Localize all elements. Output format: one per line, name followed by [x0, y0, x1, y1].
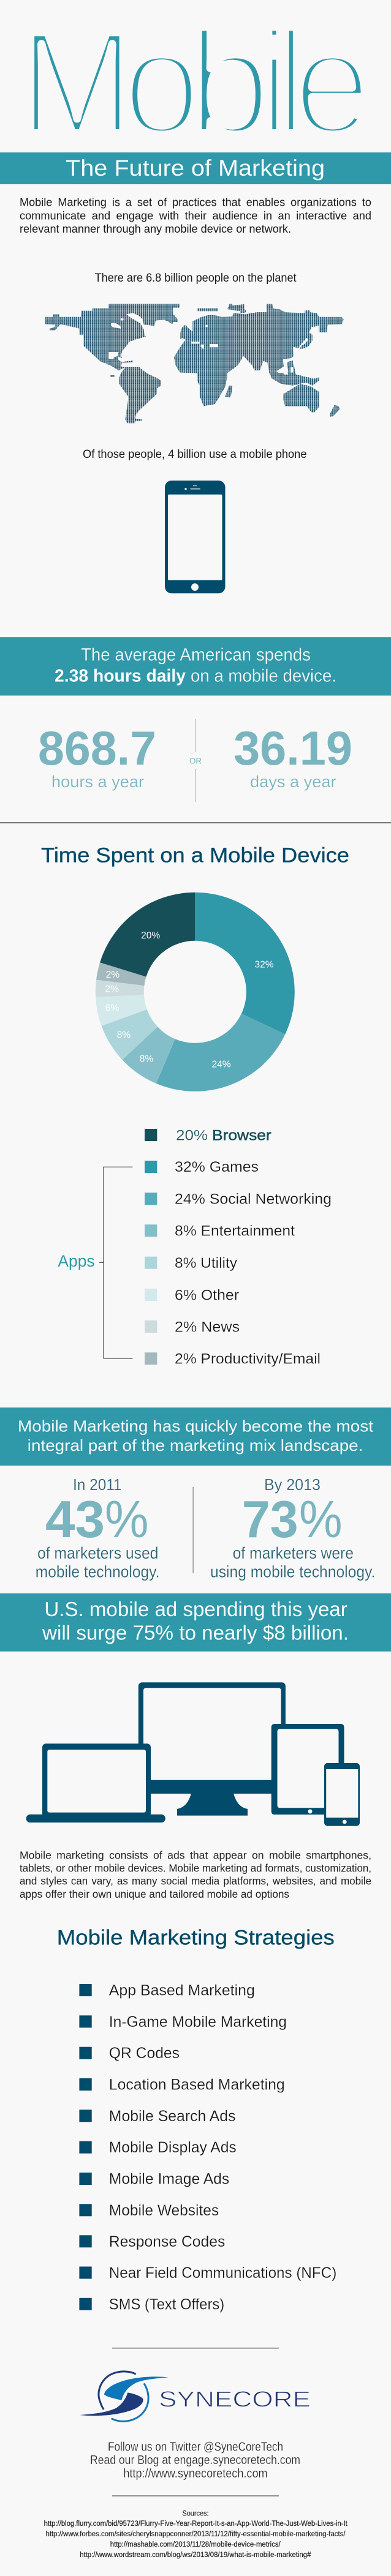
banner: The Future of Marketing: The Future of Marketing — [66, 155, 325, 181]
stat: 43% in 2011: of marketers used — [37, 1544, 158, 1562]
banner: average American — [0, 637, 391, 695]
banner: integral part of marketing mix: Mobile Marketing has quickly become the most — [18, 1417, 374, 1435]
strategies list: App Based Marketing — [109, 1982, 255, 1999]
strategies list: Response Codes — [109, 2233, 225, 2250]
logo: Synecore — [80, 2372, 311, 2421]
banner: average American: on a mobile device. — [191, 666, 336, 686]
banner: ad spending: U.S. mobile ad spending this year — [44, 1598, 347, 1620]
strategies list: SMS (Text Offers) — [109, 2296, 224, 2313]
donut chart: 20% — [141, 930, 160, 941]
title: Mobile: b — [188, 0, 271, 165]
text: world population: There are 6.8 billion people on the planet — [95, 272, 297, 285]
intro paragraph: relevant manner through any mobile device or network. — [20, 222, 291, 235]
legend: browser: Browser — [212, 1128, 271, 1144]
divider with OR: OR — [189, 757, 202, 766]
intro paragraph — [20, 196, 371, 235]
strategies list: Mobile Websites — [109, 2202, 219, 2219]
contact details: Read our Blog at engage.synecoretech.com — [90, 2454, 300, 2467]
stat: 43% in 2011: % — [105, 1491, 148, 1549]
strategies list: Mobile Search Ads — [109, 2108, 235, 2125]
divider with OR — [189, 719, 202, 802]
legend: 32% Games — [175, 1159, 259, 1175]
stat: 73% by 2013: using mobile technology. — [210, 1563, 375, 1581]
stat: 73% by 2013: By 2013 — [264, 1475, 321, 1494]
sources: Sources: — [182, 2510, 209, 2517]
stat: days a year: days a year — [250, 773, 336, 791]
strategies list: QR Codes — [109, 2045, 180, 2062]
strategies list: Mobile Image Ads — [109, 2171, 229, 2188]
icon: tablet — [271, 1724, 344, 1814]
heading: Time Spent on a Mobile Device: Time Spent on a Mobile Device — [41, 844, 349, 867]
stat: 43% in 2011 — [36, 1475, 159, 1581]
strategies list: Near Field Communications (NFC) — [109, 2264, 336, 2282]
donut chart: 32% — [254, 960, 274, 970]
banner: integral part of marketing mix — [0, 1407, 391, 1466]
heading: Mobile Marketing Strategies: Mobile Marketing Strategies — [57, 1926, 335, 1950]
stat: 43% in 2011: 43 — [45, 1491, 105, 1549]
banner: ad spending — [0, 1593, 391, 1652]
sources: http://www.wordstream.com/blog/ws/2013/08/19/what-is-mobile-marketing# — [80, 2552, 311, 2559]
dotted world map — [45, 304, 344, 424]
strategies list: Mobile Display Ads — [109, 2139, 237, 2156]
stat: 73% by 2013: of marketers were — [233, 1544, 354, 1562]
icon: monitor — [139, 1682, 286, 1816]
icon: smartphone — [165, 481, 226, 593]
icon: devices — [26, 1682, 360, 1826]
stat: 43% in 2011: mobile technology. — [36, 1563, 159, 1581]
icon: phone — [324, 1763, 360, 1826]
contact details — [90, 2440, 300, 2481]
legend — [145, 1128, 332, 1368]
stat: 73% by 2013: 73 — [242, 1491, 298, 1549]
paragraph: mobile marketing ads: apps offer their own unique and tailored mobile ad options — [20, 1888, 289, 1900]
sources: http://mashable.com/2013/11/28/mobile-device-metrics/ — [110, 2541, 281, 2548]
legend: 6% Other — [175, 1287, 239, 1303]
stat: days a year: 36.19 — [233, 722, 352, 775]
banner: average American: 2.38 hours daily — [55, 666, 186, 686]
logo: Synecore: SYNECORE — [159, 2387, 311, 2412]
title: Mobile: l — [277, 1, 305, 165]
stat: 73% by 2013 — [210, 1475, 375, 1581]
banner: integral part of marketing mix: integral part of the marketing mix landscape. — [28, 1436, 363, 1455]
donut chart — [96, 893, 295, 1091]
strategies list — [79, 1982, 336, 2313]
donut chart: 24% — [211, 1059, 231, 1070]
stat: 73% by 2013: % — [299, 1491, 343, 1549]
strategies list: In-Game Mobile Marketing — [109, 2013, 287, 2031]
sources: http://www.forbes.com/sites/cherylsnappconner/2013/11/12/fifty-essential-mobile-marketing-facts/ — [45, 2531, 346, 2538]
donut chart: 8% — [117, 1030, 131, 1041]
bracket: Apps — [58, 1167, 132, 1358]
title: Mobile — [19, 0, 371, 165]
legend: 8% Entertainment — [175, 1223, 295, 1240]
donut chart: 2% — [105, 984, 119, 994]
paragraph: mobile marketing ads: tablets, or other mobile devices. Mobile marketing ad formats, customization, — [20, 1862, 371, 1874]
stat: hours a year: 868.7 — [38, 722, 156, 775]
legend: 2% News — [175, 1319, 240, 1336]
donut chart: 6% — [105, 1003, 119, 1014]
banner: average American: The average American spends — [81, 645, 311, 665]
legend: browser: 20% — [176, 1128, 208, 1144]
paragraph: mobile marketing ads — [20, 1849, 371, 1900]
text: mobile users: Of those people, 4 billion use a mobile phone — [83, 448, 306, 461]
legend: 2% Productivity/Email — [175, 1351, 321, 1368]
stat: 43% in 2011: In 2011 — [73, 1475, 122, 1494]
paragraph: mobile marketing ads: Mobile marketing consists of ads that appear on mobile smartphones, — [20, 1849, 371, 1862]
icon: laptop — [26, 1743, 165, 1822]
sources: http://blog.flurry.com/bid/95723/Flurry-Five-Year-Report-It-s-an-App-World-The-Just-Web-Lives-in-It — [44, 2520, 348, 2528]
stat: hours a year: hours a year — [51, 773, 144, 791]
sources — [44, 2510, 348, 2559]
title: Mobile: M — [19, 0, 135, 165]
legend: browser — [145, 1128, 271, 1144]
banner: ad spending: will surge 75% to nearly $8 billion. — [42, 1621, 349, 1644]
paragraph: mobile marketing ads: and styles can vary, as many social media platforms, websites, and mobile — [20, 1875, 371, 1887]
title: Mobile: o — [123, 0, 201, 165]
donut chart: 8% — [140, 1054, 153, 1064]
intro paragraph: Mobile Marketing is a set of practices that enables organizations to — [20, 196, 371, 209]
legend: 8% Utility — [175, 1255, 237, 1271]
contact details: http://www.synecoretech.com — [123, 2467, 268, 2481]
intro paragraph: communicate and engage with their audience in an interactive and — [20, 209, 371, 222]
legend: 24% Social Networking — [175, 1191, 332, 1208]
contact details: Follow us on Twitter @SyneCoreTech — [108, 2440, 283, 2454]
title: Mobile: e — [293, 0, 371, 165]
title: Mobile: i — [260, 1, 288, 165]
banner: The Future of Marketing — [0, 152, 391, 184]
donut chart: 2% — [106, 970, 120, 980]
bracket: Apps: Apps — [58, 1252, 95, 1270]
strategies list: Location Based Marketing — [109, 2076, 285, 2094]
